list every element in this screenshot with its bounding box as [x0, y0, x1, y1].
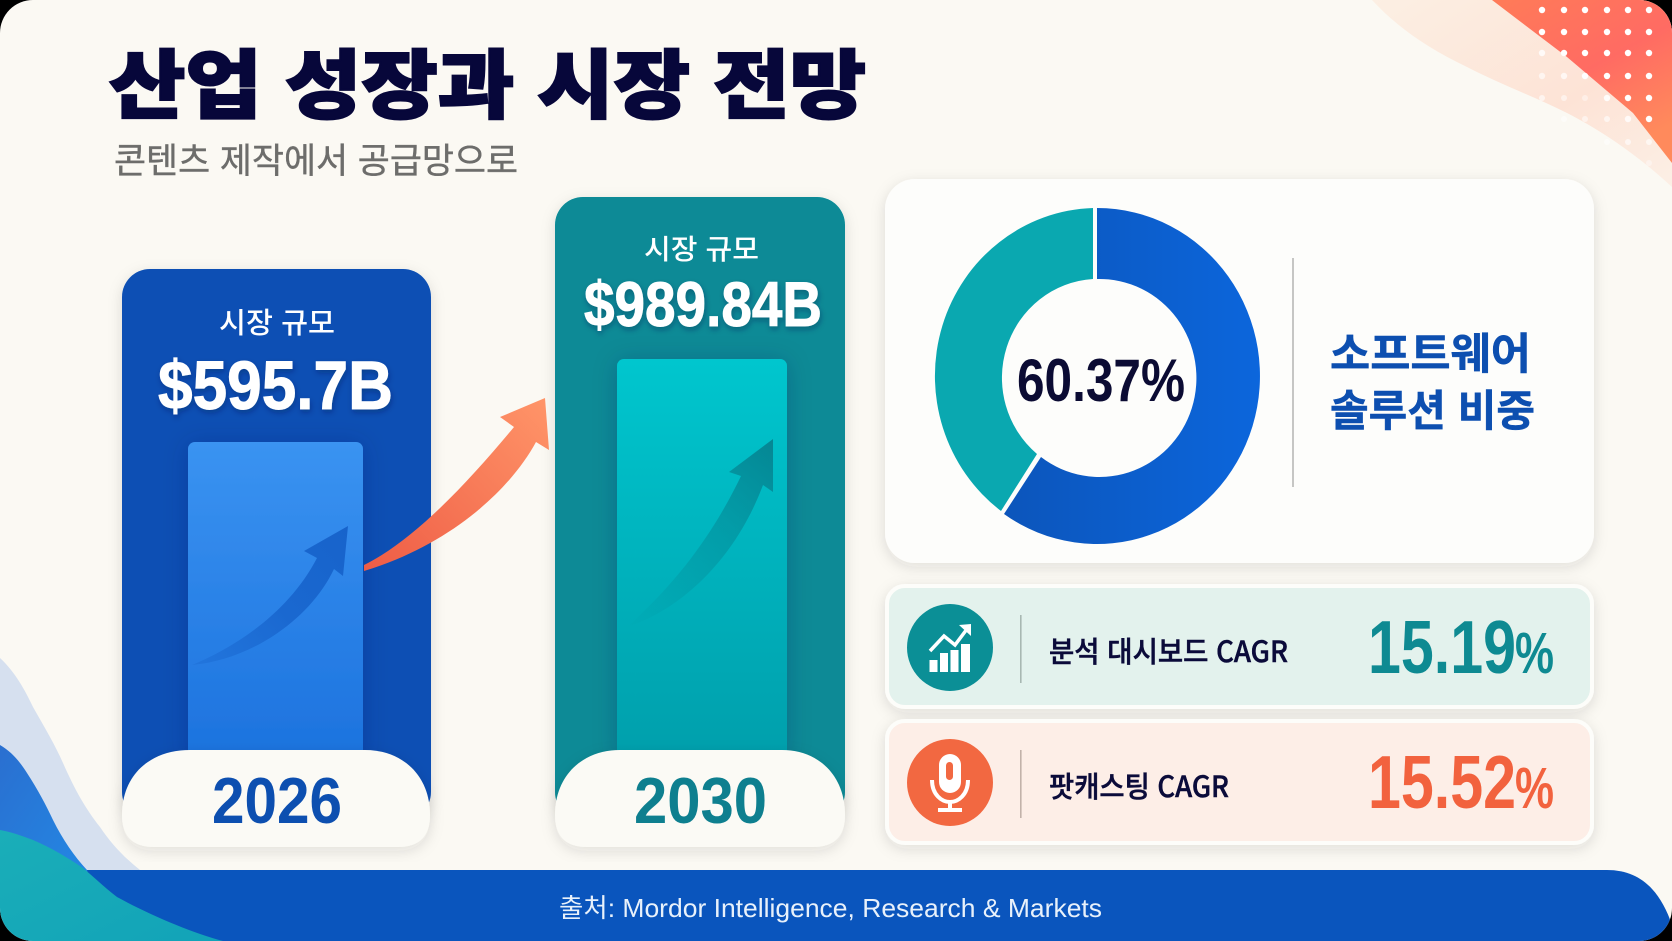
year pill	[555, 750, 845, 847]
value	[1372, 620, 1553, 674]
value: 15.52	[1368, 740, 1516, 824]
card background	[885, 179, 1594, 563]
card background	[122, 269, 431, 820]
inner arrow	[192, 526, 348, 665]
panel: podcasting CAGR	[887, 721, 1592, 843]
value: 15.19	[1368, 605, 1516, 689]
inner bar	[188, 442, 363, 762]
donut label: 솔루션 비중	[1330, 377, 1535, 439]
card background	[555, 197, 845, 820]
inner arrow	[664, 439, 773, 600]
donut chart	[935, 208, 1260, 544]
decoration: bottom left waves	[0, 658, 223, 941]
value	[1372, 756, 1553, 808]
donut value: 60.37%	[1017, 347, 1185, 414]
row background	[887, 721, 1592, 843]
inner bar	[617, 359, 787, 759]
donut label: 소프트웨어	[1330, 320, 1531, 382]
year pill	[122, 750, 430, 847]
label: 시장 규모	[219, 300, 335, 342]
value: $595.7B	[158, 347, 393, 424]
panel: 2026 market size	[122, 269, 431, 847]
arrow: growth	[364, 398, 549, 571]
label: 분석 대시보드 CAGR	[1049, 629, 1288, 671]
value: %	[1515, 756, 1554, 821]
value: $989.84B	[584, 270, 822, 340]
panel: 2030 market size	[555, 197, 845, 847]
subtitle: 콘텐츠 제작에서 공급망으로	[114, 133, 518, 184]
decoration: top right corner	[1372, 0, 1672, 187]
panel: software share	[885, 179, 1594, 563]
label: 팟캐스팅 CAGR	[1049, 764, 1229, 806]
year: 2026	[212, 764, 342, 837]
label: 시장 규모	[644, 228, 759, 268]
footer bar	[60, 870, 1672, 941]
panel: analytics dashboard CAGR	[887, 586, 1592, 707]
footer source text: 출처: Mordor Intelligence, Research & Markets	[559, 893, 1102, 923]
year: 2030	[634, 764, 767, 837]
title: 산업 성장과 시장 전망	[109, 25, 866, 134]
value: %	[1515, 621, 1554, 686]
icon: microphone	[907, 739, 993, 826]
donut label	[1331, 332, 1534, 430]
row background	[887, 586, 1592, 707]
icon: growth chart	[907, 604, 993, 691]
